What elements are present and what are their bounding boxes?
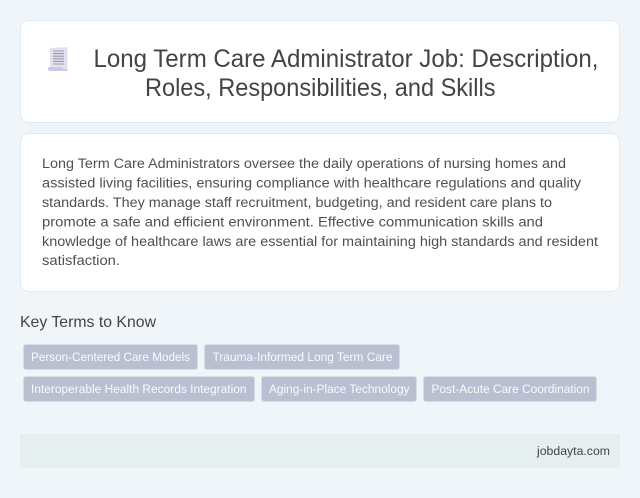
description text: promote a safe and efficient environment. Effective communication skills and <box>42 214 543 230</box>
tag: trauma-informed: Trauma-Informed Long Term Care <box>212 350 393 364</box>
tag: post-acute: Post-Acute Care Coordination <box>432 382 590 396</box>
title: Long Term Care Administrator Job: Description, <box>94 45 598 73</box>
footer source text: jobdayta.com <box>536 444 610 458</box>
description text: satisfaction. <box>42 253 120 269</box>
footer bar <box>20 434 620 468</box>
heading: key terms: Key Terms to Know <box>20 314 156 331</box>
description text <box>42 156 598 269</box>
tag: aging-in-place: Aging-in-Place Technology <box>269 382 410 396</box>
tag: aging-in-place <box>262 376 416 402</box>
description text: assisted living facilities, ensuring compliance with healthcare regulations and quality <box>42 176 582 192</box>
tag list <box>24 344 596 402</box>
tag: person-centered <box>24 344 198 370</box>
tag: interoperable records: Interoperable Health Records Integration <box>31 382 247 396</box>
tag: trauma-informed <box>204 344 400 370</box>
tag: post-acute <box>424 376 596 402</box>
icon: document scroll <box>48 47 68 71</box>
description text: knowledge of healthcare laws are essential for maintaining high standards and resident <box>42 234 598 250</box>
title: Roles, Responsibilities, and Skills <box>145 74 496 102</box>
title <box>94 45 598 102</box>
tag: interoperable records <box>24 376 254 402</box>
panel: description card <box>20 134 620 292</box>
tag: person-centered: Person-Centered Care Models <box>31 350 190 364</box>
description text: standards. They manage staff recruitment, budgeting, and resident care plans to <box>42 195 552 211</box>
panel: header card <box>20 20 620 122</box>
description text: Long Term Care Administrators oversee the daily operations of nursing homes and <box>42 156 566 172</box>
